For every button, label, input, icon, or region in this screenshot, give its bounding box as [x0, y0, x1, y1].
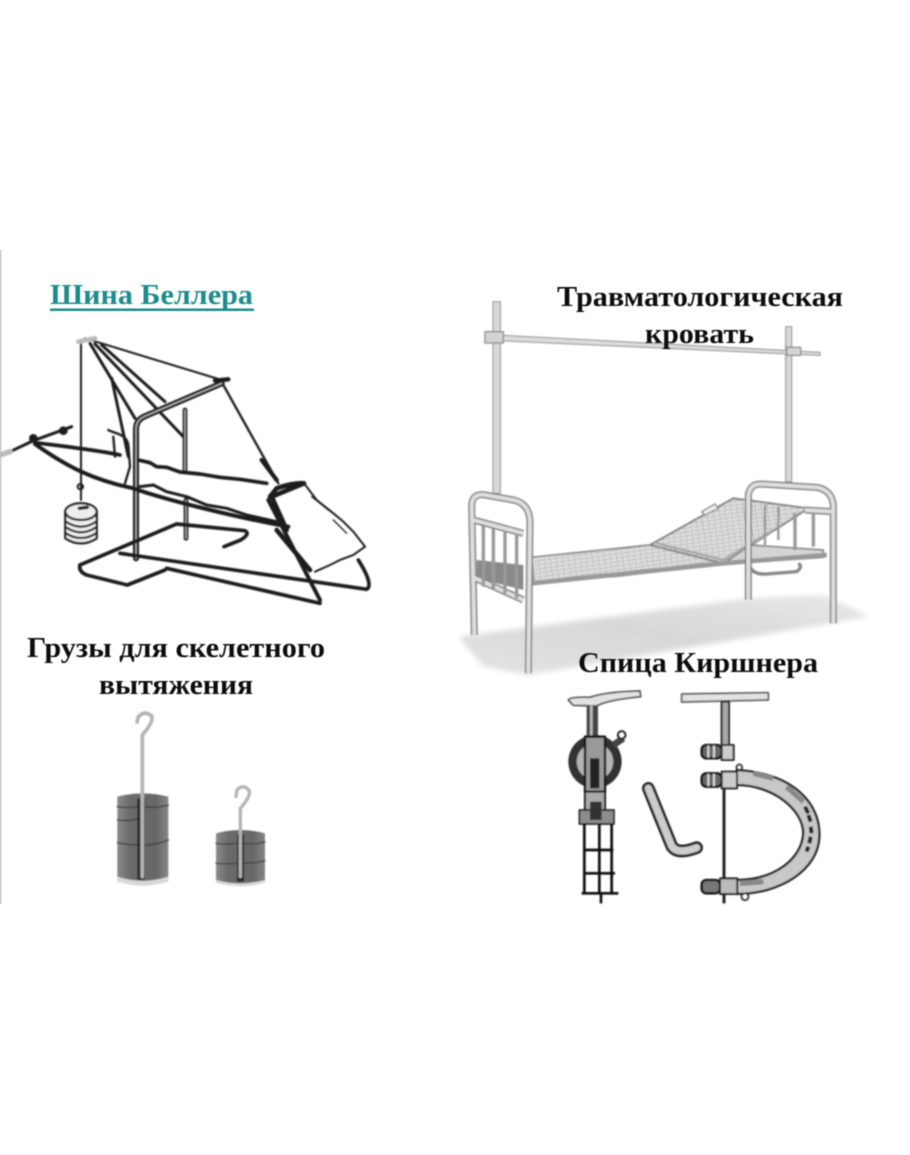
- illustration: traumatology bed: [458, 302, 870, 675]
- heading: traumatology bed: Травматологическая: [557, 282, 843, 313]
- heading: Beller splint: Шина Беллера: [50, 280, 253, 311]
- splint frame: [136, 379, 228, 558]
- small weight: [216, 787, 265, 886]
- pulley ropes: [78, 338, 278, 483]
- left edge line: [0, 250, 2, 904]
- illustration: Kirschner wire drill: [568, 691, 819, 903]
- bed head tubes: [472, 484, 833, 673]
- heading: traction weights: [27, 633, 325, 701]
- leg and supports: [35, 430, 365, 572]
- mesh bed: [477, 498, 827, 590]
- illustration: traction weights: [117, 713, 265, 886]
- heading: Kirschner wire: Спица Киршнера: [578, 648, 818, 679]
- traction rod: [0, 426, 72, 455]
- large weight: [117, 713, 168, 886]
- floor shadow: [458, 595, 870, 675]
- heading: traction weights: вытяжения: [99, 670, 253, 701]
- base frame: [80, 500, 369, 603]
- overhead frame: [485, 302, 820, 493]
- heading: traumatology bed: кровать: [645, 319, 754, 350]
- heading: traumatology bed: [557, 282, 843, 350]
- heading: traction weights: Грузы для скелетного: [27, 633, 325, 664]
- wire holder bow: [682, 693, 819, 903]
- weight on string: [65, 342, 97, 543]
- hand drill: [568, 691, 641, 903]
- crank handle: [648, 788, 697, 851]
- illustration: Beller splint: [0, 338, 369, 603]
